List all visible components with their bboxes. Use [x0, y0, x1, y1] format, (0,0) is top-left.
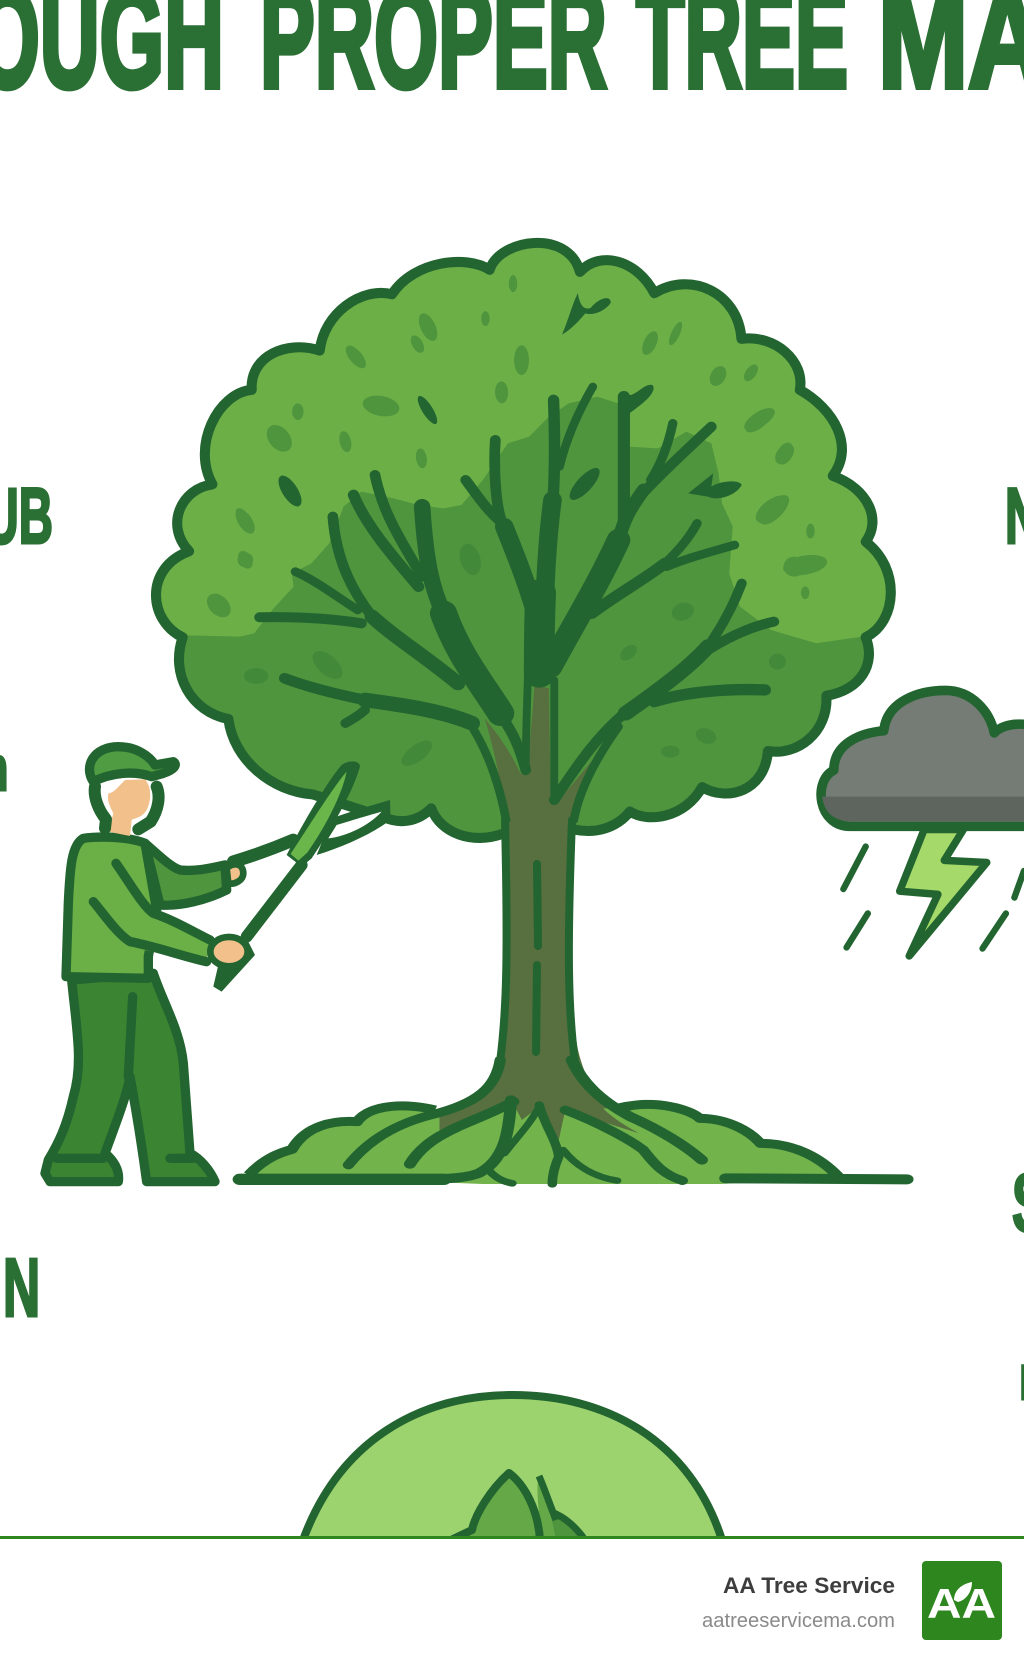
tree branches — [260, 385, 774, 820]
pruning shears — [213, 761, 391, 992]
footer — [0, 1536, 1024, 1666]
person pruning — [45, 747, 227, 1182]
bottom leaf badge — [303, 1395, 722, 1540]
upper leaf specks — [202, 275, 829, 622]
heart leaf — [562, 293, 611, 335]
trousers — [45, 973, 215, 1182]
back arm — [145, 843, 227, 905]
tree trunk — [450, 685, 620, 1120]
torso and front arm — [66, 837, 210, 978]
mid leaf specks — [232, 382, 805, 771]
storm cloud — [821, 690, 1024, 826]
company name: AA Tree Service — [723, 1573, 895, 1598]
partial side labels — [0, 471, 1024, 1409]
lightning bolt — [900, 830, 987, 956]
title — [0, 0, 1024, 118]
rain drops — [843, 847, 1024, 949]
head — [108, 779, 150, 836]
cap — [89, 747, 175, 782]
partial side labels: N — [3, 1240, 40, 1334]
website: aatreeservicema.com — [702, 1610, 895, 1632]
logo: AA — [927, 1580, 996, 1627]
crown outline — [156, 243, 891, 838]
hands — [210, 864, 248, 966]
ground mound and roots — [240, 1060, 907, 1184]
tree crown — [150, 230, 910, 880]
logo — [922, 1561, 1002, 1640]
